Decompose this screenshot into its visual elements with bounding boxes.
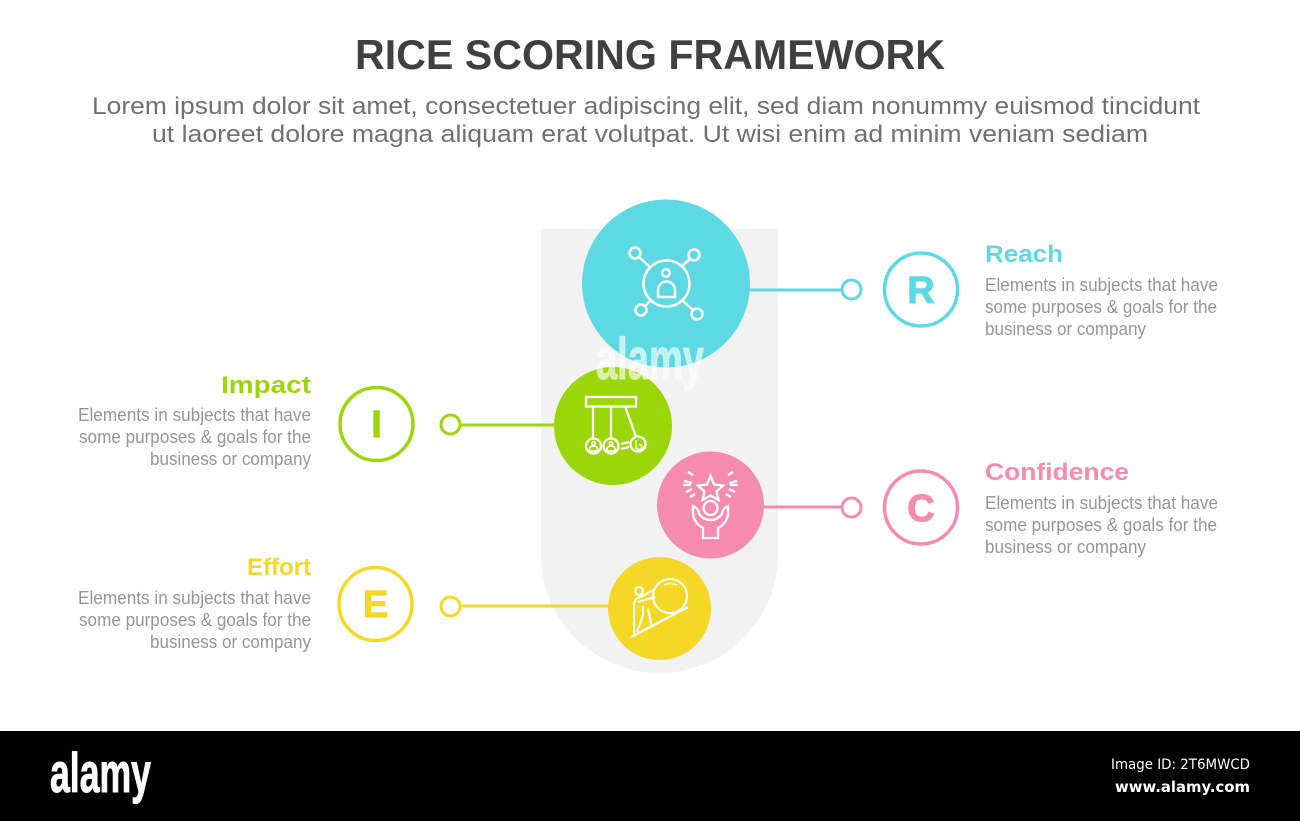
text block: impact: Elements in subjects that have (78, 405, 311, 425)
icon: effort sisyphus (631, 579, 688, 637)
badge: I: I (371, 404, 382, 446)
footer image id: Image ID: 2T6MWCD (1111, 757, 1250, 773)
text block: effort: Effort (247, 554, 311, 581)
text block: reach: Elements in subjects that have (985, 275, 1218, 295)
text block: reach: business or company (985, 319, 1146, 339)
text block: effort: Elements in subjects that have (78, 588, 311, 608)
badge: I (340, 388, 413, 460)
badge: C (884, 471, 958, 544)
circle: impact (554, 367, 672, 485)
circle: effort (608, 557, 711, 660)
subtitle (92, 93, 1200, 148)
text block: impact: business or company (150, 449, 311, 469)
text block: effort: some purposes & goals for the (79, 610, 311, 630)
text block: confidence (985, 459, 1218, 557)
text block: reach: Reach (985, 241, 1063, 268)
subtitle: ut laoreet dolore magna aliquam erat volutpat. Ut wisi enim ad minim veniam sediam (152, 121, 1148, 148)
footer logo: alamy (50, 741, 151, 804)
text block: impact: Impact (221, 372, 311, 399)
icon: impact pendulum (586, 397, 646, 454)
badge: R: R (907, 270, 935, 312)
circle: confidence (657, 452, 764, 558)
text block: reach (985, 241, 1218, 339)
text block: reach: some purposes & goals for the (985, 297, 1217, 317)
text block: confidence: Elements in subjects that have (985, 493, 1218, 513)
footer url: www.alamy.com (1115, 778, 1250, 796)
watermark: alamy (596, 327, 704, 392)
badge: C: C (907, 488, 935, 530)
connector: effort (441, 597, 615, 616)
connector: reach (745, 280, 861, 299)
title: RICE SCORING FRAMEWORK (355, 31, 945, 78)
text block: effort: business or company (150, 632, 311, 652)
icon: reach network (630, 248, 702, 320)
text block: impact: some purposes & goals for the (79, 427, 311, 447)
badge: R (884, 253, 958, 326)
panel: background capsule (541, 229, 778, 673)
connector: impact (441, 415, 560, 434)
text block: impact (78, 372, 311, 469)
subtitle: Lorem ipsum dolor sit amet, consectetuer adipiscing elit, sed diam nonummy euismod tincidunt (92, 93, 1200, 120)
icon: confidence star and hands (683, 472, 738, 538)
text block: confidence: Confidence (985, 459, 1129, 486)
text block: effort (78, 554, 311, 652)
circle: reach (582, 200, 750, 368)
text block: confidence: some purposes & goals for the (985, 515, 1217, 535)
footer bar (0, 731, 1300, 821)
connector: confidence (760, 498, 861, 517)
badge: E: E (363, 584, 388, 626)
text block: confidence: business or company (985, 537, 1146, 557)
badge: E (339, 568, 412, 640)
